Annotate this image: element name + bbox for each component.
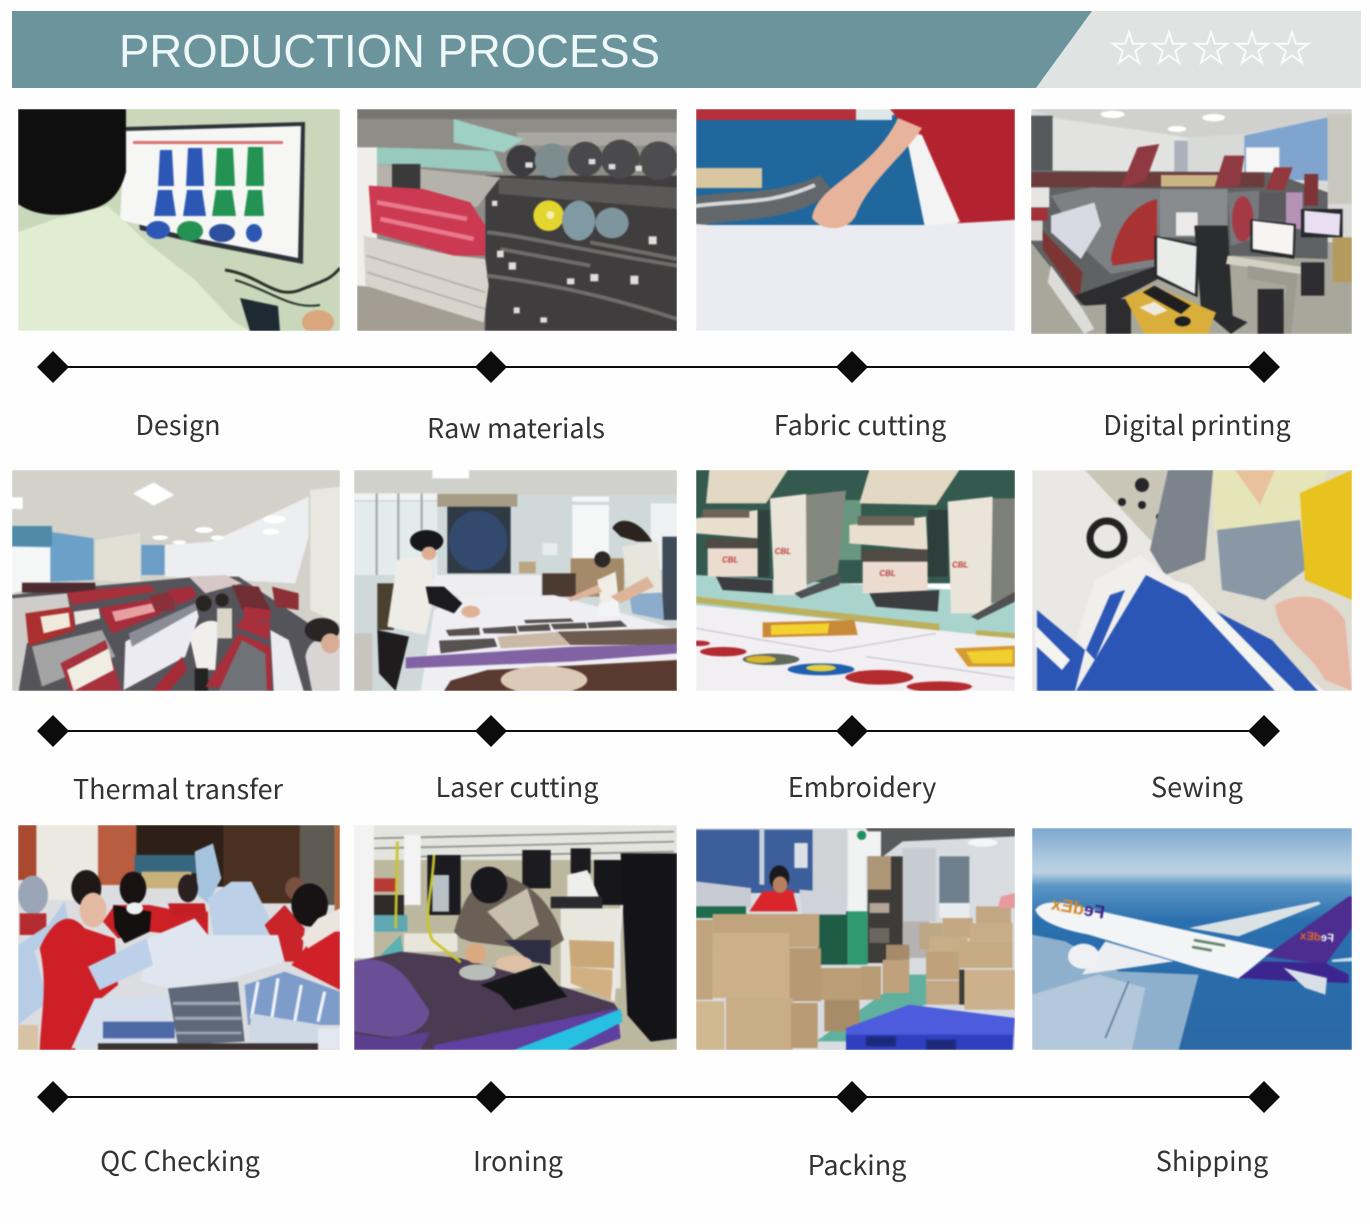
label: Shipping: Shipping — [1156, 1140, 1268, 1179]
photo: embroidery: CBL — [722, 556, 739, 565]
photo: design — [18, 109, 340, 331]
photo: fabric cutting — [696, 109, 1015, 331]
timeline row 1 — [37, 351, 1280, 383]
title: PRODUCTION PROCESS — [119, 25, 660, 77]
label: Thermal transfer: Thermal transfer — [73, 768, 284, 807]
photo: thermal transfer — [12, 470, 340, 691]
label: QC Checking: QC Checking — [100, 1140, 260, 1179]
label: Laser cutting: Laser cutting — [435, 766, 599, 805]
photo: shipping: FedEx — [1050, 894, 1106, 923]
label: Packing: Packing — [808, 1144, 906, 1183]
icon: five stars — [1113, 32, 1308, 63]
photo: embroidery: CBL — [775, 547, 791, 556]
photo: packing — [696, 828, 1015, 1050]
timeline row 2 — [37, 715, 1280, 747]
photo: digital printing — [1031, 109, 1352, 334]
photo: raw materials — [357, 109, 677, 331]
photo: sewing — [1032, 470, 1352, 691]
label: Design: Design — [135, 404, 221, 443]
label: Sewing: Sewing — [1151, 766, 1243, 805]
label: Fabric cutting: Fabric cutting — [774, 404, 946, 443]
photo: ironing — [354, 825, 677, 1050]
photo: laser cutting — [354, 470, 677, 691]
label: Raw materials: Raw materials — [427, 407, 605, 446]
photo: shipping: FedEx — [1299, 930, 1334, 945]
photo: embroidery — [696, 470, 1015, 691]
photo: QC checking — [18, 825, 340, 1050]
label: Ironing: Ironing — [473, 1140, 563, 1179]
timeline row 3 — [37, 1081, 1280, 1113]
label: Embroidery: Embroidery — [788, 766, 936, 805]
photo: shipping — [1032, 828, 1352, 1050]
photo: embroidery: CBL — [879, 569, 896, 578]
label: Digital printing: Digital printing — [1103, 404, 1291, 443]
header banner — [12, 11, 1361, 88]
photo: embroidery: CBL — [952, 560, 969, 569]
